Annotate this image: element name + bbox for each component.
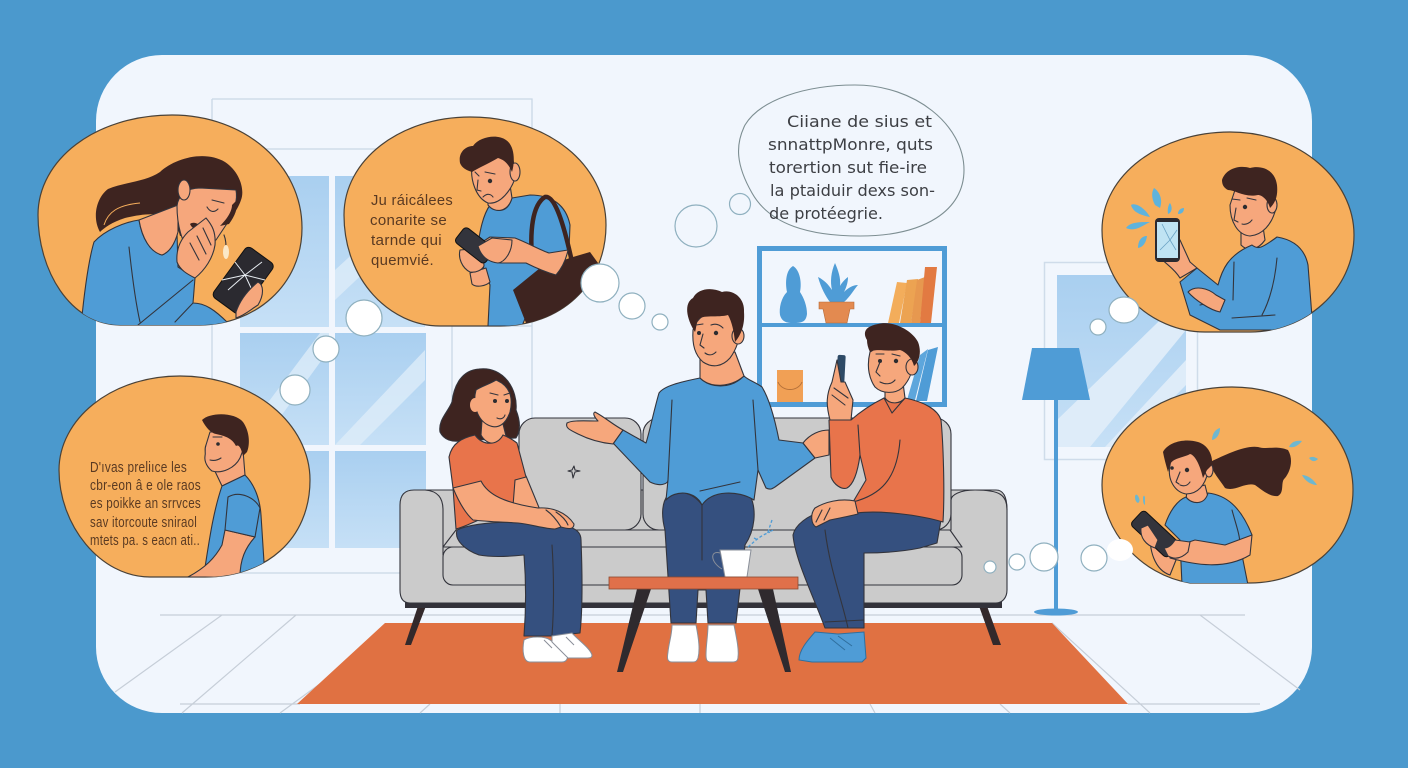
bubble text: sav itorcoute sniraol xyxy=(90,515,197,531)
speech bubble text: torertion sut fie-ire xyxy=(769,158,927,177)
person: man in centre xyxy=(567,289,829,662)
bubble text xyxy=(370,193,453,269)
coffee table xyxy=(609,577,798,672)
bookshelf xyxy=(760,248,944,404)
bubble text: es poikke an srrvces xyxy=(90,496,201,512)
bubble text: mtets pa. s eacn ati.. xyxy=(90,533,200,549)
bubble text: quemvié. xyxy=(371,253,434,269)
thought circles xyxy=(280,194,1139,571)
bubble text: cbr-eon â e ole raos xyxy=(90,478,201,494)
right window xyxy=(1044,262,1198,460)
room panel xyxy=(96,55,1312,713)
icon: blue books xyxy=(907,347,938,401)
bubble text xyxy=(90,460,201,549)
thought bubble: woman with cracked phone xyxy=(38,115,302,330)
bubble text: tarnde qui xyxy=(371,233,442,249)
sofa button xyxy=(984,561,996,573)
thought bubble: man in profile xyxy=(59,376,310,580)
icon: books upper shelf xyxy=(888,267,937,323)
coffee cup xyxy=(713,520,774,577)
speech bubble text: Ciiane de sius et xyxy=(787,112,932,131)
speech bubble text: la ptaiduir dexs son- xyxy=(770,181,935,200)
icon: potted plant xyxy=(818,263,858,323)
person: man with phone xyxy=(793,323,944,662)
thought bubble: man with bag xyxy=(344,117,606,326)
speech bubble text xyxy=(768,112,935,223)
bubble text: conarite se xyxy=(370,213,447,229)
left window xyxy=(212,99,532,573)
speech bubble text: snnattpMonre, quts xyxy=(768,135,933,154)
person: woman on sofa xyxy=(440,369,592,662)
speech bubble text: de protéegrie. xyxy=(769,204,883,223)
bubble text: Ju ráicálees xyxy=(371,193,453,209)
thought bubble: man with cracked screen xyxy=(1102,132,1354,332)
icon: shopping bag xyxy=(777,370,803,402)
floor lines xyxy=(115,615,1300,713)
floor lamp xyxy=(1022,348,1090,616)
thought bubble: woman with ponytail xyxy=(1102,387,1353,585)
bubble text: D'ıvas preliıce les xyxy=(90,460,187,476)
speech bubble xyxy=(739,85,964,236)
rug xyxy=(297,623,1128,704)
sofa xyxy=(400,418,1007,645)
icon: vase xyxy=(780,266,807,323)
